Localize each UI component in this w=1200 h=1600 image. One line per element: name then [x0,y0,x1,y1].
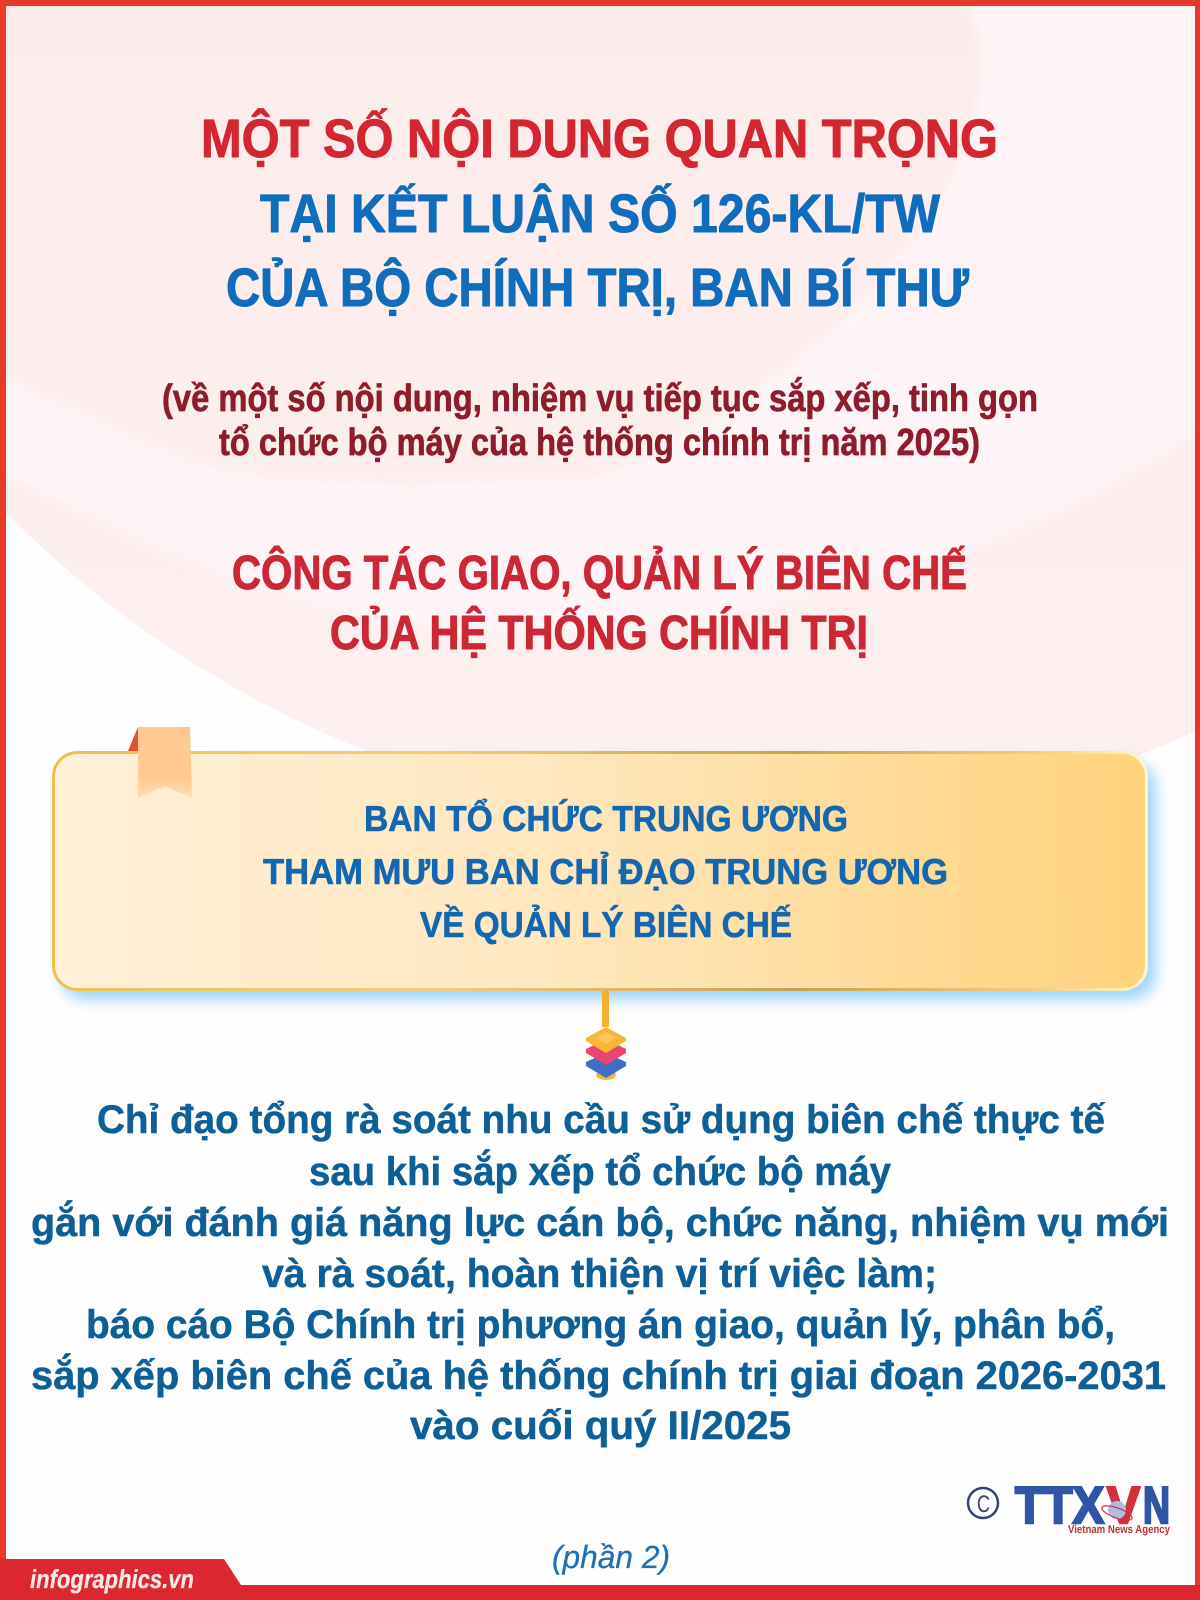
subtitle [162,377,1038,464]
main title: MỘT SỐ NỘI DUNG QUAN TRỌNG [201,108,998,169]
section heading: CÔNG TÁC GIAO, QUẢN LÝ BIÊN CHẾ [232,545,967,600]
body text: và rà soát, hoàn thiện vị trí việc làm; [262,1252,937,1296]
callout text [263,798,948,945]
logo: TTXVN copyright: N [1143,1477,1170,1535]
main title: TẠI KẾT LUẬN SỐ 126-KL/TW [260,183,940,244]
body text: vào cuối quý II/2025 [410,1404,791,1448]
logo: TTXVN copyright: Vietnam News Agency [1068,1524,1171,1536]
section heading: CỦA HỆ THỐNG CHÍNH TRỊ [330,605,868,660]
logo: TTXVN copyright: TTX [1015,1477,1104,1535]
main title [201,108,998,318]
section heading [232,545,967,660]
body text: gắn với đánh giá năng lực cán bộ, chức năng, nhiệm vụ mới [31,1200,1169,1245]
subtitle: (về một số nội dung, nhiệm vụ tiếp tục sắp xếp, tinh gọn [162,377,1038,420]
panel: central organisation commission callout [54,727,1156,1000]
subtitle: tổ chức bộ máy của hệ thống chính trị năm 2025) [219,422,980,464]
icon: connector with stacked diamonds [586,991,626,1080]
body text: Chỉ đạo tổng rà soát nhu cầu sử dụng biên chế thực tế [97,1098,1106,1142]
logo: TTXVN copyright: V [1107,1477,1140,1535]
body text: sau khi sắp xếp tổ chức bộ máy [309,1149,892,1194]
footer bar with source tab [0,1559,1200,1600]
callout text: BAN TỔ CHỨC TRUNG ƯƠNG [364,798,848,839]
background with pale pink circles [6,6,1195,756]
logo: TTXVN copyright [968,1477,1171,1536]
part label: (phần 2) [552,1539,670,1575]
body text: báo cáo Bộ Chính trị phương án giao, quản lý, phân bổ, [86,1303,1115,1347]
logo: TTXVN copyright: C [977,1491,990,1518]
main title: CỦA BỘ CHÍNH TRỊ, BAN BÍ THƯ [226,257,969,318]
footer source label: infographics.vn [30,1564,194,1594]
body text: sắp xếp biên chế của hệ thống chính trị giai đoạn 2026-2031 [31,1353,1166,1398]
body text [31,1098,1169,1448]
callout text: THAM MƯU BAN CHỈ ĐẠO TRUNG ƯƠNG [263,851,948,892]
icon: ribbon bookmark [128,727,192,798]
callout text: VỀ QUẢN LÝ BIÊN CHẾ [420,904,792,945]
